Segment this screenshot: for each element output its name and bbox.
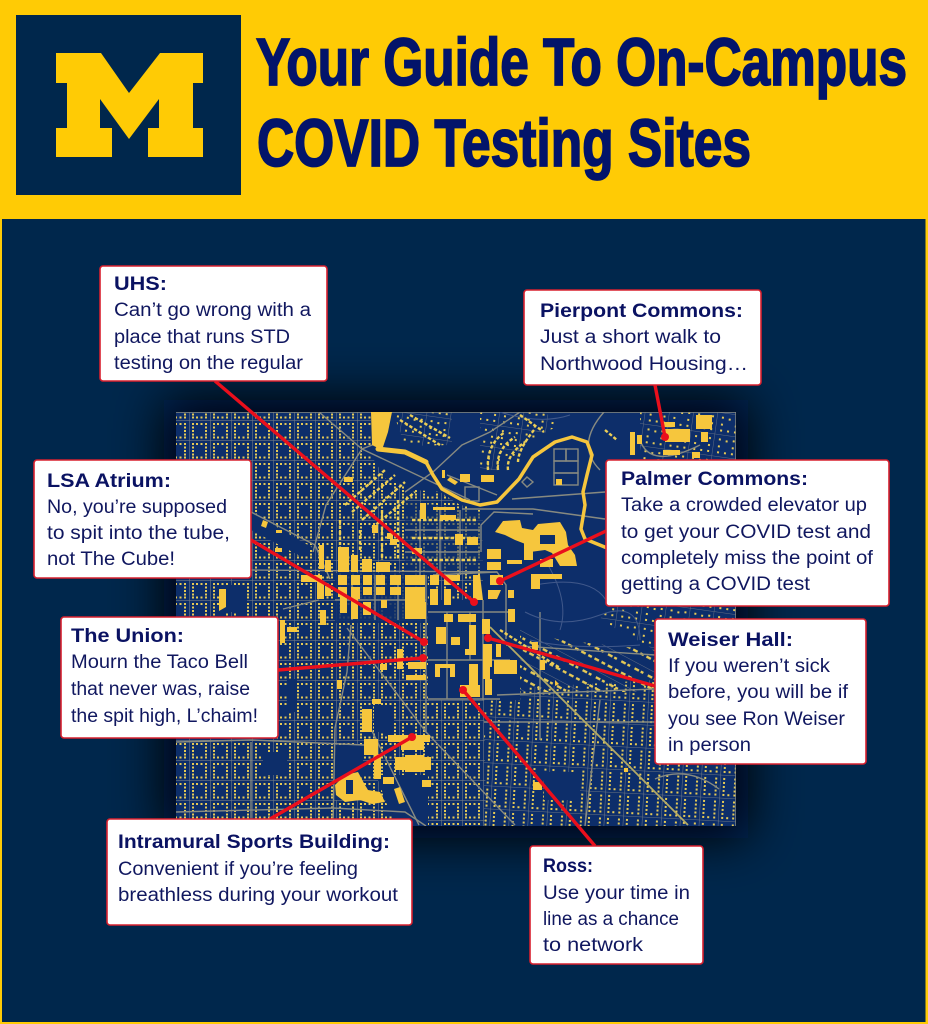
callout: LSA Atrium: LSA Atrium: xyxy=(47,471,171,492)
callout: Pierpont Commons: Northwood Housing… xyxy=(540,354,748,375)
callout: Ross: to network xyxy=(543,935,644,956)
faint arboretum paths xyxy=(500,412,640,647)
south athletic campus xyxy=(364,735,542,804)
callout: UHS: place that runs STD xyxy=(114,327,290,348)
railway diagonal xyxy=(490,627,688,825)
callout: Pierpont Commons xyxy=(524,290,761,385)
arrow: The Union leader xyxy=(278,654,427,670)
residential accents xyxy=(261,520,628,772)
roads xyxy=(176,412,736,826)
arrow: Weiser Hall leader xyxy=(484,634,655,686)
callout: Weiser Hall: before, you will be if xyxy=(668,682,849,703)
curved and dense housing rows xyxy=(340,415,617,668)
courtyard in medical campus xyxy=(540,535,555,544)
callout: LSA Atrium: to spit into the tube, xyxy=(47,523,230,544)
arrow: Intramural Sports Building leader xyxy=(270,733,416,819)
arrow: Pierpont Commons leader xyxy=(655,385,669,441)
title xyxy=(256,25,907,181)
callout: Weiser Hall xyxy=(655,619,866,764)
title: COVID Testing Sites xyxy=(257,106,751,181)
callout: Intramural Sports Building: Intramural Sports Building: xyxy=(118,832,390,853)
callout: Ross: line as a chance xyxy=(543,909,679,930)
callout: Intramural Sports Building: breathless during your workout xyxy=(118,885,399,906)
callout: UHS: Can’t go wrong with a xyxy=(114,300,311,321)
river xyxy=(371,412,612,550)
callout: Ross: Use your time in xyxy=(543,883,690,904)
arrow: Palmer Commons leader xyxy=(496,531,606,585)
Lower Town and North Campus xyxy=(442,415,712,485)
callout: Palmer Commons: to get your COVID test and xyxy=(621,522,871,543)
callout: LSA Atrium: not The Cube! xyxy=(47,549,175,570)
callout: Weiser Hall: Weiser Hall: xyxy=(668,630,793,651)
open park patches xyxy=(219,500,580,826)
callout: UHS xyxy=(100,266,327,381)
campus map xyxy=(176,412,736,826)
callout: The Union: The Union: xyxy=(71,626,184,647)
callout: Palmer Commons: Palmer Commons: xyxy=(621,469,808,490)
callout: Weiser Hall: you see Ron Weiser xyxy=(668,709,846,730)
callout: Palmer Commons: completely miss the point of xyxy=(621,548,874,569)
arrow: Ross leader xyxy=(459,686,595,846)
callout: Pierpont Commons: Just a short walk to xyxy=(540,327,721,348)
callout: Ross xyxy=(530,846,703,964)
callout: UHS: testing on the regular xyxy=(114,353,304,374)
callout: LSA Atrium: No, you’re supposed xyxy=(47,497,227,518)
callout: UHS: UHS: xyxy=(114,274,167,295)
medical campus xyxy=(495,520,577,566)
callout: The Union: Mourn the Taco Bell xyxy=(71,652,248,673)
downtown xyxy=(219,539,451,625)
logo: block M on navy square xyxy=(16,15,241,195)
callout: Palmer Commons xyxy=(606,460,889,606)
callout: Weiser Hall: If you weren’t sick xyxy=(668,656,831,677)
callout: The Union: that never was, raise xyxy=(71,679,250,700)
callout: Ross: Ross: xyxy=(543,856,593,877)
callout: LSA Atrium xyxy=(34,460,251,578)
central campus blocks xyxy=(280,575,517,732)
callout: Intramural Sports Building xyxy=(107,819,412,925)
hole in sports building xyxy=(346,780,353,794)
arrow: LSA Atrium leader xyxy=(251,540,428,646)
callout: Pierpont Commons: Pierpont Commons: xyxy=(540,301,743,322)
arrow: UHS leader xyxy=(215,381,478,606)
callout: Palmer Commons: Take a crowded elevator up xyxy=(621,495,867,516)
callout: The Union: the spit high, L’chaim! xyxy=(71,706,258,727)
map shadow halo xyxy=(164,400,748,838)
main navy panel xyxy=(2,219,926,1022)
residential street texture xyxy=(176,412,736,826)
callout: Intramural Sports Building: Convenient if you’re feeling xyxy=(118,859,358,880)
callout: Weiser Hall: in person xyxy=(668,735,751,756)
callout: The Union xyxy=(61,617,278,738)
buildings xyxy=(219,415,712,804)
callout: Palmer Commons: getting a COVID test xyxy=(621,574,811,595)
